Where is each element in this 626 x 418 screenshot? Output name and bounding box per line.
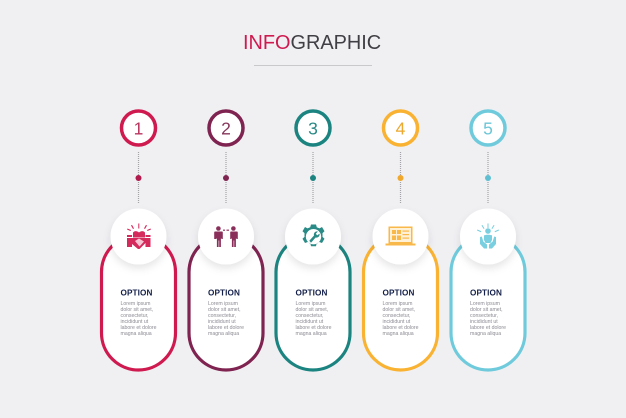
number badge 4: 4 (396, 118, 406, 138)
number badge 5: 5 (483, 118, 493, 138)
option text 5: magna aliqua (470, 331, 501, 337)
option text 4: OPTION (382, 288, 414, 298)
number badge 2: 2 (221, 118, 231, 138)
option text 1: incididunt ut (120, 319, 149, 325)
connector 5 (485, 152, 491, 204)
option text 2: dolor sit amet, (208, 307, 241, 313)
option text 3: OPTION (296, 288, 328, 298)
column 2 (189, 111, 263, 370)
pill panel 1 (102, 235, 176, 370)
column 4 (364, 111, 438, 370)
option text 5: OPTION (470, 288, 502, 298)
option text 3: labore et dolore (296, 325, 332, 331)
pill panel 3 (276, 235, 350, 370)
option text 5: Lorem ipsum (470, 301, 500, 307)
number badge 1 (122, 111, 156, 145)
option text 2: consectetur, (208, 313, 236, 319)
option text 5: dolor sit amet, (470, 307, 503, 313)
column 5 (451, 111, 525, 370)
icon circle 2 (198, 208, 254, 264)
connector 4 (398, 152, 404, 204)
option text 1: consectetur, (120, 313, 148, 319)
option text 3: incididunt ut (296, 319, 324, 325)
option text 3: Lorem ipsum (296, 301, 325, 307)
icon: gear with wrench (302, 224, 324, 246)
number badge 3 (296, 111, 330, 145)
option text 2 (208, 288, 244, 337)
option text 4: incididunt ut (382, 319, 411, 325)
option text 1: Lorem ipsum (120, 301, 150, 307)
option text 4: magna aliqua (382, 331, 414, 337)
pill panel 4 (364, 235, 438, 370)
option text 5 (470, 288, 506, 337)
option text 3: dolor sit amet, (296, 307, 328, 313)
column 3 (276, 111, 350, 370)
pill panel 2 (189, 235, 263, 370)
option text 5: incididunt ut (470, 319, 498, 325)
icon circle 5 (460, 208, 516, 264)
option text 4: consectetur, (382, 313, 410, 319)
pill panel 5 (451, 235, 525, 370)
option text 4: labore et dolore (382, 325, 419, 331)
option text 1: OPTION (120, 288, 152, 298)
icon: two people (214, 226, 238, 247)
connector 2 (223, 152, 229, 204)
number badge 4 (384, 111, 418, 145)
option text 5: consectetur, (470, 313, 498, 319)
number badge 1: 1 (134, 118, 143, 138)
option text 1: labore et dolore (120, 325, 157, 331)
title: INFOGRAPHIC (243, 32, 381, 54)
option text 2: labore et dolore (208, 325, 244, 331)
number badge 2 (209, 111, 243, 145)
icon circle 4 (372, 208, 428, 264)
option text 5: labore et dolore (470, 325, 506, 331)
icon: handshake (127, 224, 151, 249)
option text 2: Lorem ipsum (208, 301, 238, 307)
option text 2: OPTION (208, 288, 240, 298)
option text 2: incididunt ut (208, 319, 236, 325)
option text 3: magna aliqua (296, 331, 327, 337)
number badge 3: 3 (308, 118, 318, 138)
option text 3: consectetur, (296, 313, 323, 319)
icon: laptop (386, 226, 416, 246)
column 1 (102, 111, 176, 370)
option text 1 (120, 288, 157, 337)
connector 3 (310, 152, 316, 204)
option text 3 (296, 288, 332, 337)
icon: hands holding person (477, 224, 499, 248)
option text 2: magna aliqua (208, 331, 239, 337)
option text 4: Lorem ipsum (382, 301, 412, 307)
icon circle 1 (110, 208, 166, 264)
option text 1: magna aliqua (120, 331, 152, 337)
connector 1 (136, 152, 142, 204)
option text 1: dolor sit amet, (120, 307, 153, 313)
icon circle 3 (285, 208, 341, 264)
option text 4 (382, 288, 419, 337)
number badge 5 (471, 111, 505, 145)
option text 4: dolor sit amet, (382, 307, 415, 313)
